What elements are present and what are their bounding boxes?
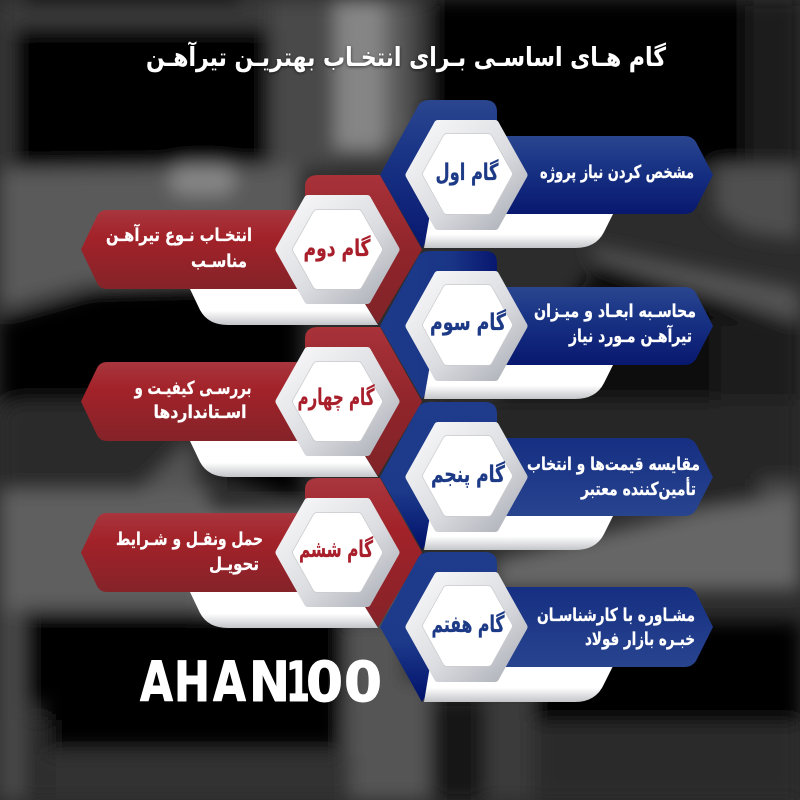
step 5 description [527,454,700,500]
step 7 description: مشـاوره با کارشناسـان [537,605,695,626]
logo: AHAN100: 0 [306,650,343,714]
logo: AHAN100: A [213,650,246,714]
step 1 label: گام اول [436,159,499,186]
step 2 description: انتخـاب نـوع تیرآهـن [106,223,252,246]
step 1 panel: blue [380,100,713,248]
step 6 description: حمل ونقـل و شـرایط [116,529,263,550]
title: گام هـای اساسـی بـرای انتخـاب بهتریـن تیرآهـن [146,41,667,73]
step 5 label: گام پنجم [431,461,505,488]
step 2 description: مناسـب [191,251,247,272]
step 7 panel: blue [380,552,713,702]
logo: AHAN100: 0 [344,650,382,714]
logo: AHAN100: H [174,650,210,714]
step 1 description: مشخص کردن نیاز پروژه [540,162,694,183]
step 7 description [537,605,695,650]
step 4 description: بررسـی کیفیـت و [134,378,252,399]
step 5 description: مقایسه قیمت‌ها و انتخاب [527,454,700,475]
step 6 panel: red [81,478,422,628]
step 3 description: محاسـبه ابعـاد و میـزان [534,301,696,322]
step 3 panel: blue [380,251,713,399]
step 6 description: تحویـل [209,554,259,575]
step 3 label: گام سوم [430,309,506,336]
step 5 panel: blue [380,402,713,550]
step 6 description [116,529,263,575]
step 6 label: گام ششم [299,536,373,563]
logo: AHAN100: A [140,650,173,714]
step 2 description [106,223,252,272]
step 2 label: گام دوم [304,235,371,262]
step 4 description [134,378,252,423]
logo: AHAN100 [140,650,382,714]
step 2 panel: red [81,175,422,325]
step 3 description [534,301,696,347]
step 5 description: تأمین‌کننده معتبر [580,477,696,500]
step 4 panel: red [81,327,422,477]
step 7 label: گام هفتم [432,611,505,638]
step 4 description: اسـتانداردها [154,402,246,423]
step 7 description: خبـره بازار فولاد [585,629,695,650]
logo: AHAN100: N [249,650,290,714]
step 3 description: تیرآهـن مـورد نیاز [568,324,692,347]
logo: AHAN100: 1 [286,650,310,714]
step 4 label: گام چهارم [298,384,375,411]
